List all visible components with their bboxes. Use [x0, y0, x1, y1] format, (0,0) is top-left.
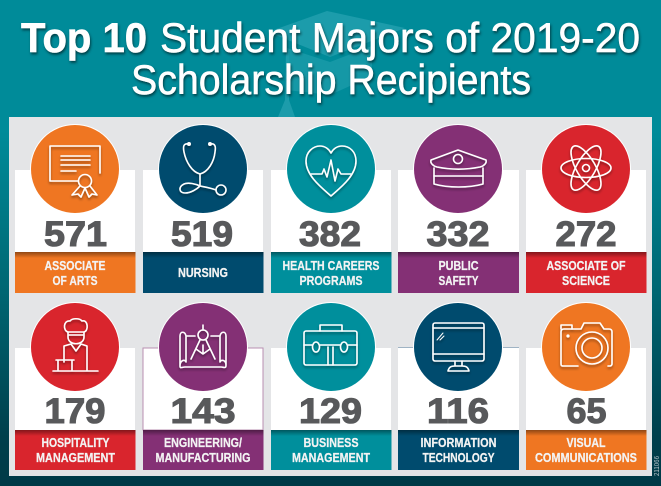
icon: camera [561, 323, 612, 366]
label: Visual Communications [535, 436, 637, 465]
label: Health Careers Programs: HEALTH CAREERS [282, 259, 380, 273]
label: Visual Communications: COMMUNICATIONS [535, 451, 637, 465]
label: Information Technology [420, 436, 496, 465]
card: Public Safety [398, 124, 519, 293]
label: Public Safety [438, 259, 479, 288]
title [21, 14, 640, 103]
label: Business Management: BUSINESS [304, 436, 358, 450]
main panel [9, 117, 652, 476]
card: Hospitality Management [15, 302, 136, 470]
graduation cap watermark [268, 11, 405, 117]
title: Top 10 [21, 14, 147, 61]
number: 179: 179 [44, 392, 106, 431]
title: Scholarship Recipients [131, 56, 531, 103]
label: Health Careers Programs [282, 259, 380, 288]
label: Public Safety: PUBLIC [438, 259, 478, 273]
label: Information Technology: INFORMATION [420, 436, 496, 450]
icon: diploma [50, 146, 100, 197]
label: Engineering/Manufacturing: MANUFACTURING [156, 451, 250, 465]
label: Associate of Arts: ASSOCIATE [44, 259, 106, 273]
job number: 211066 [654, 456, 661, 476]
card: Business Management [271, 302, 392, 470]
number: 332: 332 [426, 215, 490, 254]
icon: heart with pulse [306, 146, 356, 196]
card: Associate of Science [526, 124, 646, 293]
label: Engineering/Manufacturing [156, 436, 250, 465]
icon: atom [561, 142, 611, 194]
label: Business Management [292, 436, 370, 465]
number: 571: 571 [44, 215, 107, 254]
title: Student Majors of 2019-20 [160, 14, 640, 61]
icon: briefcase [304, 325, 357, 365]
label: Hospitality Management: MANAGEMENT [36, 451, 115, 465]
number: 272: 272 [556, 215, 616, 254]
number: 116: 116 [427, 392, 489, 431]
label: Business Management: MANAGEMENT [292, 451, 370, 465]
label: Nursing: NURSING [178, 266, 228, 280]
number: 129: 129 [299, 392, 362, 431]
card: Visual Communications [526, 302, 646, 470]
number: 143: 143 [170, 392, 236, 431]
card: Associate of Arts [15, 124, 136, 293]
number: 519: 519 [171, 215, 233, 254]
label: Associate of Science: SCIENCE [562, 274, 610, 288]
label: Visual Communications: VISUAL [566, 436, 606, 450]
label: Associate of Arts [44, 259, 106, 288]
icon: stethoscope [180, 143, 226, 195]
label: Engineering/Manufacturing: ENGINEERING/ [164, 436, 242, 450]
number: 382: 382 [299, 215, 361, 254]
card: Engineering/Manufacturing [143, 302, 264, 470]
label: Public Safety: SAFETY [438, 274, 479, 288]
icon: police cap [431, 150, 486, 187]
number: 65: 65 [566, 392, 606, 431]
label: Hospitality Management: HOSPITALITY [42, 436, 110, 450]
icon: desktop monitor [433, 323, 484, 371]
card: Nursing [143, 124, 264, 293]
card: Health Careers Programs [271, 124, 392, 293]
label: Associate of Science [546, 259, 626, 288]
label: Associate of Science: ASSOCIATE OF [546, 259, 626, 273]
label: Associate of Arts: OF ARTS [52, 274, 98, 288]
label: Information Technology: TECHNOLOGY [422, 451, 495, 465]
card: Information Technology [398, 302, 519, 470]
icon: chef [53, 319, 98, 371]
label: Hospitality Management [36, 436, 115, 465]
icon: blueprint and compass [180, 325, 226, 368]
label: Health Careers Programs: PROGRAMS [300, 274, 362, 288]
